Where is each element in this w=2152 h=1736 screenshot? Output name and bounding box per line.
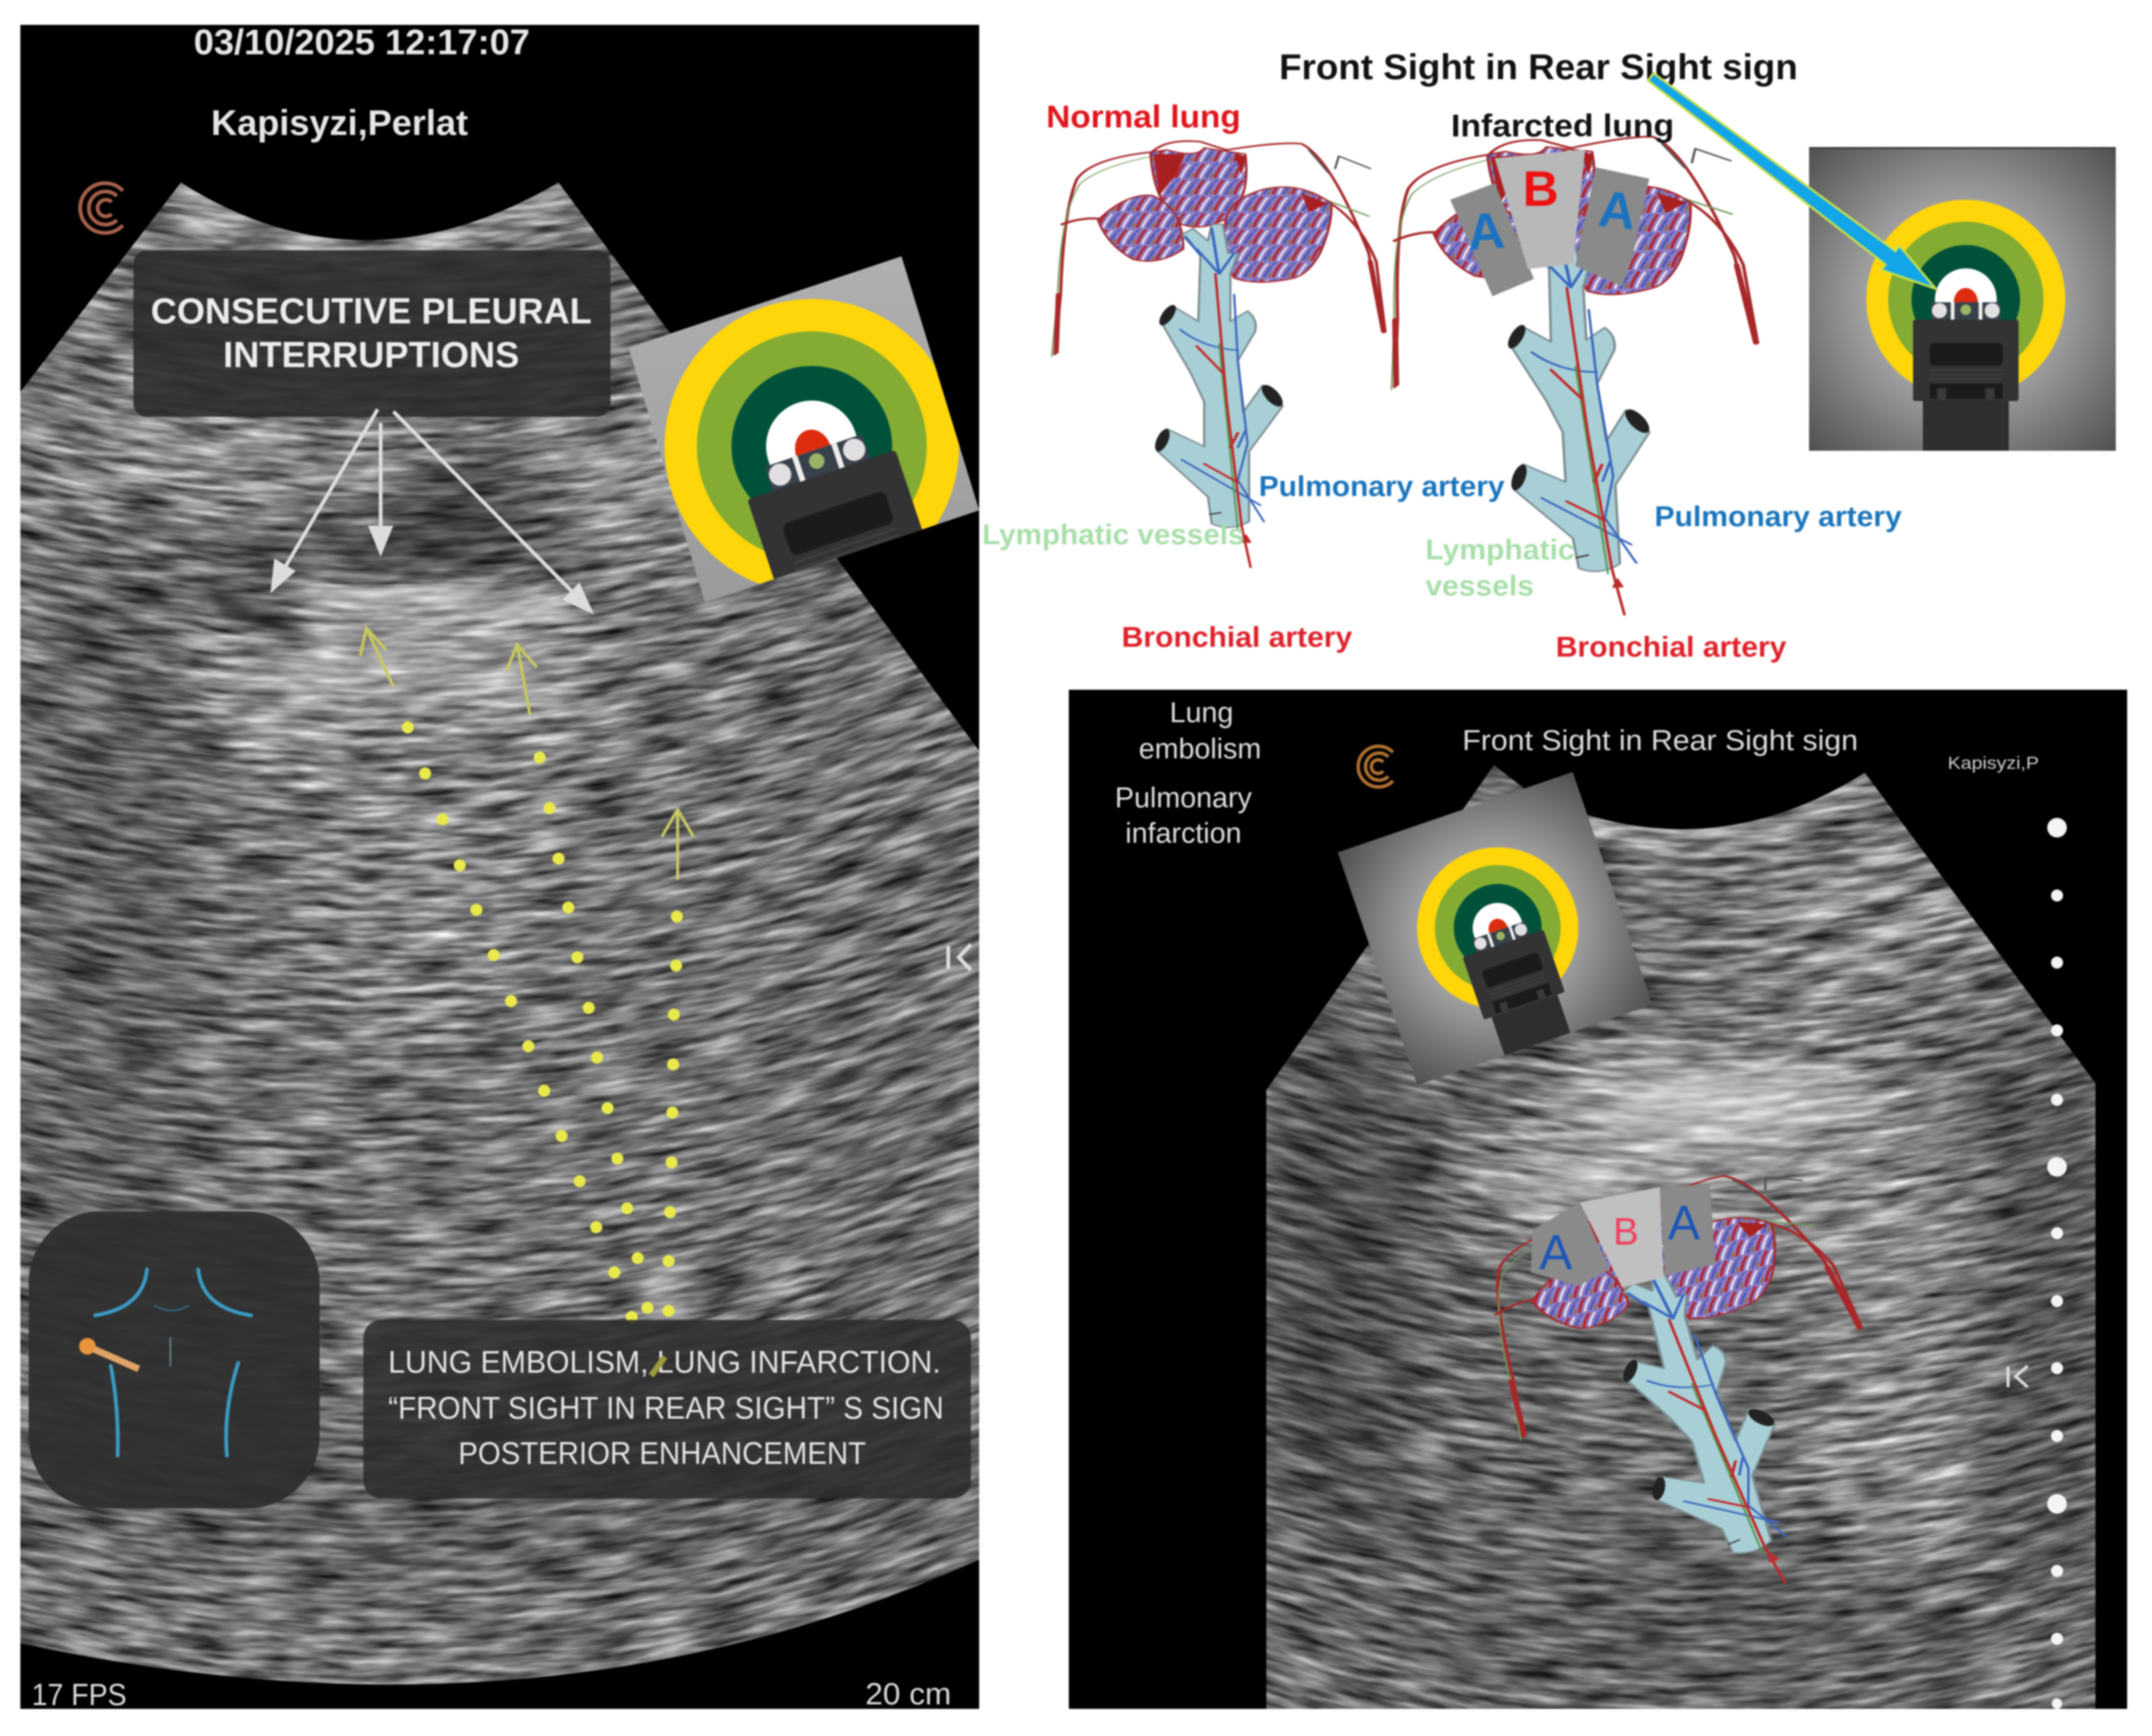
label: lung embolism: Lung	[1170, 697, 1233, 729]
label: lung embolism: embolism	[1139, 733, 1261, 765]
label: pulmonary infarction: infarction	[1125, 818, 1241, 850]
arrows: yellow enhancement markers	[360, 628, 693, 880]
icon: probe logo	[80, 183, 123, 233]
label: normal lung: Normal lung	[1046, 99, 1241, 134]
overlay: A and B zones	[1450, 149, 1649, 296]
icon: probe logo	[1358, 746, 1393, 787]
overlay: A and B zones: A	[1596, 180, 1639, 240]
panel: bottom right ultrasound	[1069, 690, 2127, 1711]
inset: front sight in rear sight, upright	[1809, 147, 2116, 452]
label: pulmonary artery right: Pulmonary artery	[1655, 501, 1902, 533]
panel: left ultrasound	[0, 22, 1055, 1712]
inset: front sight in rear sight, tilted	[618, 249, 1023, 706]
label: lymphatic vessels right: vessels	[1425, 571, 1534, 602]
label: lymphatic vessels right	[1425, 534, 1575, 602]
title: Front Sight in Rear Sight sign	[1279, 47, 1798, 87]
icon: body probe position	[29, 1211, 320, 1508]
inset: front sight in rear sight, rotated	[1338, 772, 1652, 1085]
overlay: A and B zones: A	[1668, 1196, 1700, 1250]
icon: depth marker	[948, 945, 971, 970]
icon: depth marker	[2008, 1366, 2028, 1387]
callout: consecutive pleural interruptions: INTERRUPTIONS	[223, 335, 519, 375]
panel: lung anatomy diagrams	[982, 47, 2116, 663]
label: lymphatic vessels right: Lymphatic	[1425, 534, 1575, 566]
label: bronchial artery right: Bronchial artery	[1556, 632, 1786, 663]
overlay: A and B zones: B	[1613, 1210, 1639, 1253]
callout: consecutive pleural interruptions: CONSECUTIVE PLEURAL	[151, 292, 592, 332]
callout: lung embolism text: POSTERIOR ENHANCEMENT	[458, 1435, 866, 1471]
heading: front sight in rear sight sign: Front Sight in Rear Sight sign	[1462, 725, 1858, 757]
overlay: A and B zones: A	[1539, 1224, 1572, 1280]
overlay: A and B zones: A	[1465, 201, 1507, 262]
callout: consecutive pleural interruptions	[133, 250, 611, 417]
label: lung embolism	[1139, 697, 1261, 765]
diagram: infarcted lung	[1378, 129, 1773, 626]
label: lymphatic vessels left: Lymphatic vessels	[982, 519, 1244, 551]
label: bronchial artery left: Bronchial artery	[1122, 622, 1352, 654]
depth scale dots	[2047, 818, 2067, 1709]
label: infarcted lung: Infarcted lung	[1451, 108, 1674, 143]
label: pulmonary artery left: Pulmonary artery	[1259, 471, 1505, 503]
callout: lung embolism text	[363, 1320, 971, 1499]
label: pulmonary infarction: Pulmonary	[1115, 782, 1252, 814]
operator name: Kapisyzi,Perlat	[211, 103, 468, 142]
arrow: title to front sight	[1648, 73, 1936, 289]
label: pulmonary infarction	[1115, 782, 1252, 850]
yellow dots: posterior enhancement lines	[402, 721, 683, 1323]
depth label: 20 cm	[865, 1676, 951, 1711]
operator name: Kapisyzi,P	[1948, 753, 2039, 773]
arrows: white pleural pointers	[273, 409, 590, 611]
overlay: A and B zones: B	[1523, 161, 1559, 216]
frame rate label: 17 FPS	[32, 1677, 127, 1712]
right panel background	[1069, 690, 2127, 1709]
ultrasound sector image	[1266, 754, 2103, 1711]
callout: lung embolism text: “FRONT SIGHT IN REAR SIGHT” S SIGN	[388, 1390, 944, 1425]
ultrasound sector image	[19, 182, 981, 1685]
overlay: A and B zones	[1531, 1183, 1716, 1287]
diagram: lung overlay on ultrasound	[1462, 1151, 1925, 1636]
diagram: normal lung	[1052, 141, 1385, 567]
callout: lung embolism text: LUNG EMBOLISM, LUNG INFARCTION.	[388, 1344, 941, 1379]
date and time stamp: 03/10/2025 12:17:07	[194, 22, 530, 62]
left panel background	[20, 25, 979, 1709]
